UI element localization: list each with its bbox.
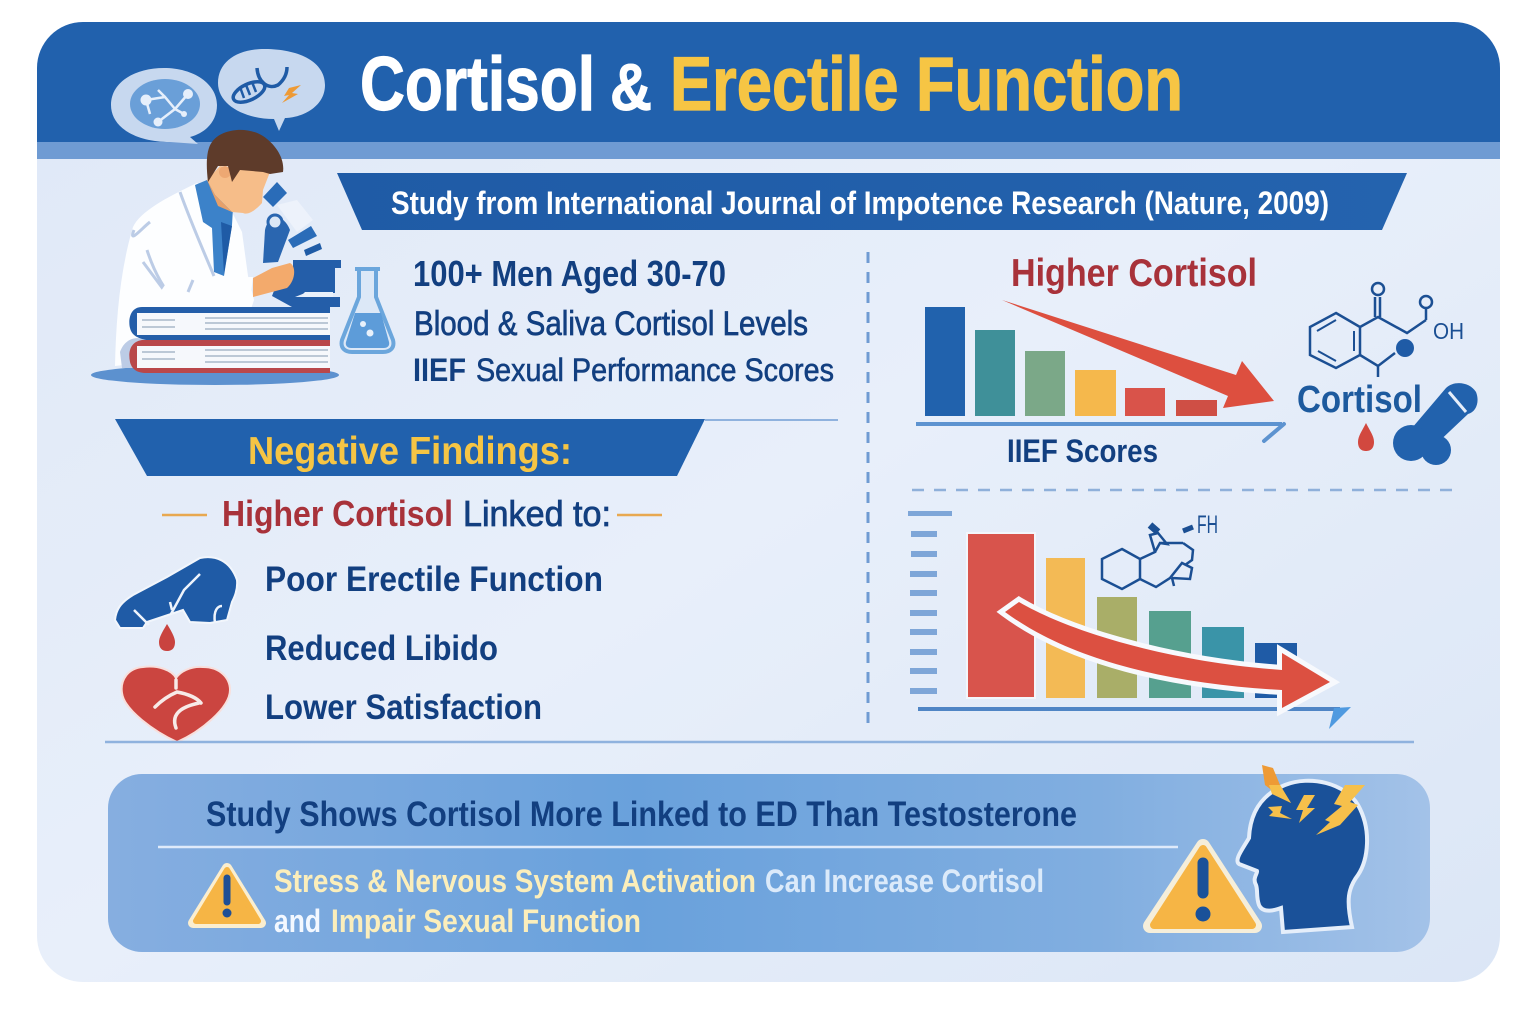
- findings list: Poor Erectile Function: [265, 560, 603, 599]
- cortisol label: Cortisol: [1297, 379, 1422, 421]
- cortisol molecule: [1310, 283, 1464, 377]
- icon: blood drop: [1358, 423, 1374, 451]
- hair: [207, 130, 283, 182]
- bottom panel: [108, 774, 1430, 952]
- y axis ticks: [908, 511, 952, 694]
- linked-to heading: [162, 493, 662, 534]
- microscope: [263, 182, 287, 207]
- hand: [253, 263, 294, 297]
- top book: [129, 307, 330, 340]
- lab coat: [115, 183, 254, 366]
- panel body text: Impair Sexual Function: [331, 903, 641, 939]
- panel body text: Can Increase Cortisol: [765, 863, 1044, 899]
- study details: Blood & Saliva Cortisol Levels: [414, 305, 808, 343]
- study details: IIEF: [413, 352, 466, 388]
- linked-to heading: Higher Cortisol: [222, 493, 453, 534]
- shirt: [195, 180, 233, 276]
- findings list: Lower Satisfaction: [265, 688, 542, 727]
- title: Cortisol: [360, 42, 595, 127]
- cortisol molecule: OH: [1433, 318, 1464, 344]
- icon: flask: [342, 269, 393, 352]
- negative findings banner: [115, 419, 838, 476]
- speech bubble: DNA and lightning: [218, 49, 325, 131]
- icon: head with lightning: [1237, 765, 1367, 932]
- steroid molecule: [1102, 511, 1218, 589]
- linked-to heading: Linked to:: [463, 493, 611, 534]
- scientist with microscope and books: [91, 130, 341, 385]
- findings list: [265, 560, 603, 727]
- study ribbon: [337, 173, 1407, 230]
- bottom book: [129, 340, 330, 373]
- small warning icon: [193, 868, 261, 923]
- bar chart: IIEF scores: [916, 307, 1284, 469]
- panel body text: Stress & Nervous System Activation: [274, 863, 756, 899]
- bar chart: declining: [908, 511, 1351, 729]
- steroid molecule: FH: [1197, 511, 1218, 539]
- sleeve: [148, 277, 253, 310]
- panel body text: and: [274, 903, 321, 939]
- negative findings banner: Negative Findings:: [248, 430, 572, 473]
- icon: warning triangle: [1150, 846, 1255, 926]
- arrow: curved decline: [1005, 602, 1330, 708]
- title: &: [610, 50, 652, 124]
- bar chart: IIEF scores: IIEF Scores: [1007, 433, 1158, 469]
- study ribbon: Study from International Journal of Impotence Research (Nature, 2009): [391, 185, 1329, 221]
- study details: 100+ Men Aged 30-70: [413, 253, 726, 294]
- bottom panel: Study Shows Cortisol More Linked to ED Than Testosterone: [206, 795, 1077, 834]
- title: Erectile Function: [670, 42, 1183, 127]
- icon: organ and drop: [115, 557, 237, 651]
- speech bubble: molecule network: [111, 68, 217, 144]
- icon: broken heart: [122, 667, 230, 742]
- shadow: [91, 365, 339, 385]
- study details: [413, 253, 834, 388]
- findings list: Reduced Libido: [265, 629, 498, 668]
- arrow: decline: [1002, 300, 1274, 408]
- icon: organ: [1393, 383, 1478, 465]
- title: [360, 42, 1183, 127]
- chart heading: Higher Cortisol: [1011, 252, 1257, 295]
- header band: [37, 22, 1500, 159]
- study details: Sexual Performance Scores: [476, 352, 834, 388]
- panel body text: [274, 863, 1044, 939]
- face and neck: [207, 166, 270, 214]
